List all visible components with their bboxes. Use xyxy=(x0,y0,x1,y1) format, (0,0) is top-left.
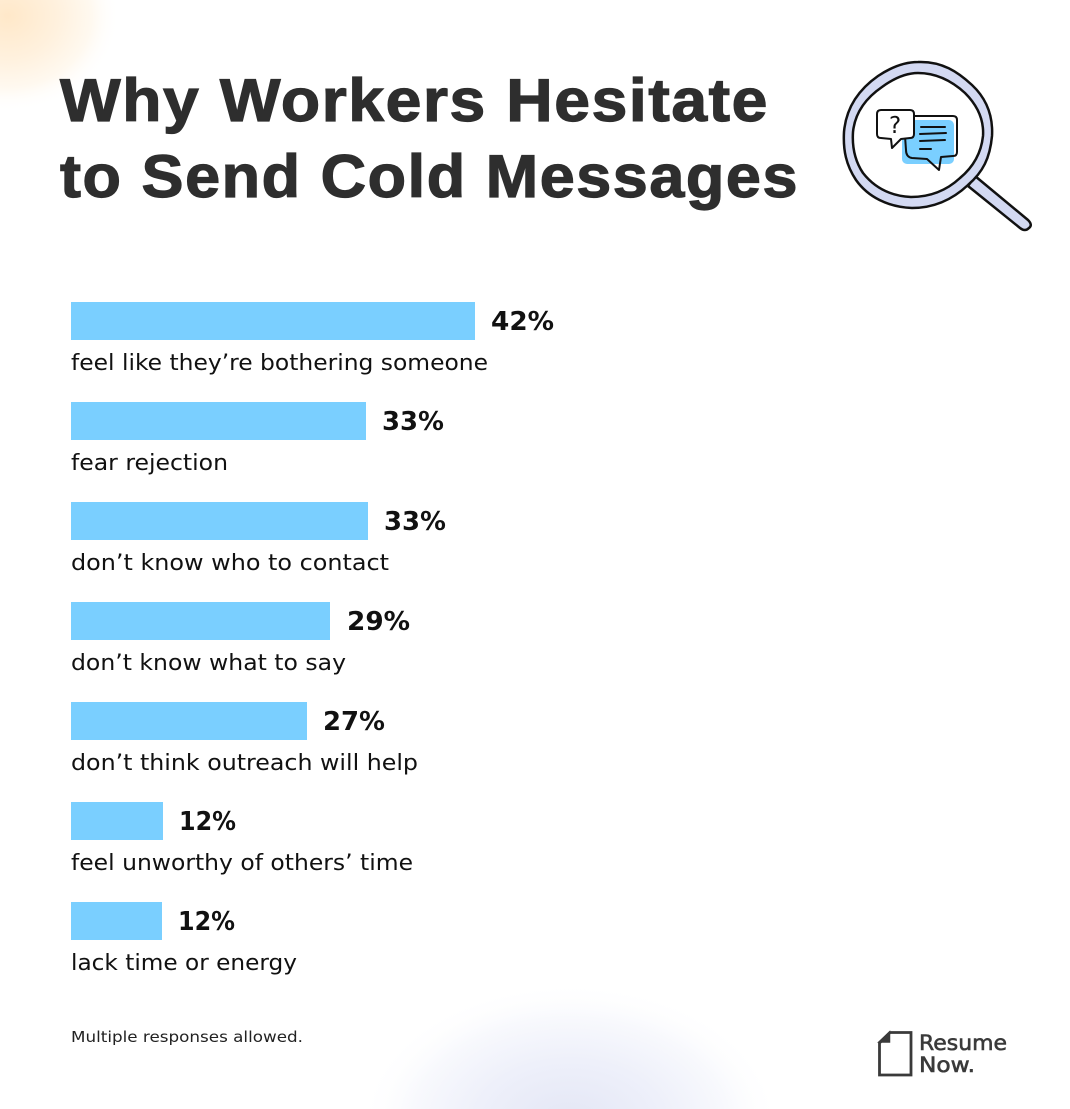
footnote: Multiple responses allowed. xyxy=(71,1028,303,1046)
bar: fear rejection: 33% xyxy=(382,407,444,437)
bar: unworthy: 12% xyxy=(179,807,236,837)
bar: fear rejection: fear rejection xyxy=(71,450,228,476)
bar: bothering someone: 42% xyxy=(491,307,554,337)
icon: message bubble xyxy=(905,116,957,170)
icon: magnifying glass with speech bubbles: ? xyxy=(889,113,901,139)
bar: bothering someone xyxy=(71,302,554,376)
bar: unworthy: feel unworthy of others’ time xyxy=(71,850,413,876)
bar: fear rejection xyxy=(71,402,444,476)
bar: who to contact: 33% xyxy=(384,507,446,537)
bar: lack time xyxy=(71,902,297,976)
bar: lack time: 12% xyxy=(178,907,235,937)
logo: Resume Now: Resume xyxy=(919,1031,1007,1055)
logo: Resume Now: Now. xyxy=(919,1053,975,1077)
bar: what to say: don’t know what to say xyxy=(71,650,346,676)
icon: magnifying glass with speech bubbles xyxy=(844,62,1031,230)
title xyxy=(60,67,799,210)
bar: what to say: 29% xyxy=(347,607,410,637)
bar: outreach will help: 27% xyxy=(323,707,385,737)
bar: outreach will help xyxy=(71,702,418,776)
title: Why Workers Hesitate xyxy=(60,67,769,134)
icon: question bubble xyxy=(877,110,914,148)
bar: who to contact: don’t know who to contact xyxy=(71,550,389,576)
logo: Resume Now xyxy=(879,1031,1007,1077)
bar: outreach will help: don’t think outreach will help xyxy=(71,750,418,776)
bar: what to say xyxy=(71,602,410,676)
bar: bothering someone: feel like they’re bothering someone xyxy=(71,350,488,376)
icon: message lines xyxy=(920,127,946,149)
bar: unworthy xyxy=(71,802,413,876)
bar chart xyxy=(71,302,554,976)
icon: blue bubble background xyxy=(902,120,954,164)
bar: who to contact xyxy=(71,502,446,576)
bar: lack time: lack time or energy xyxy=(71,950,297,976)
title: to Send Cold Messages xyxy=(60,143,799,210)
